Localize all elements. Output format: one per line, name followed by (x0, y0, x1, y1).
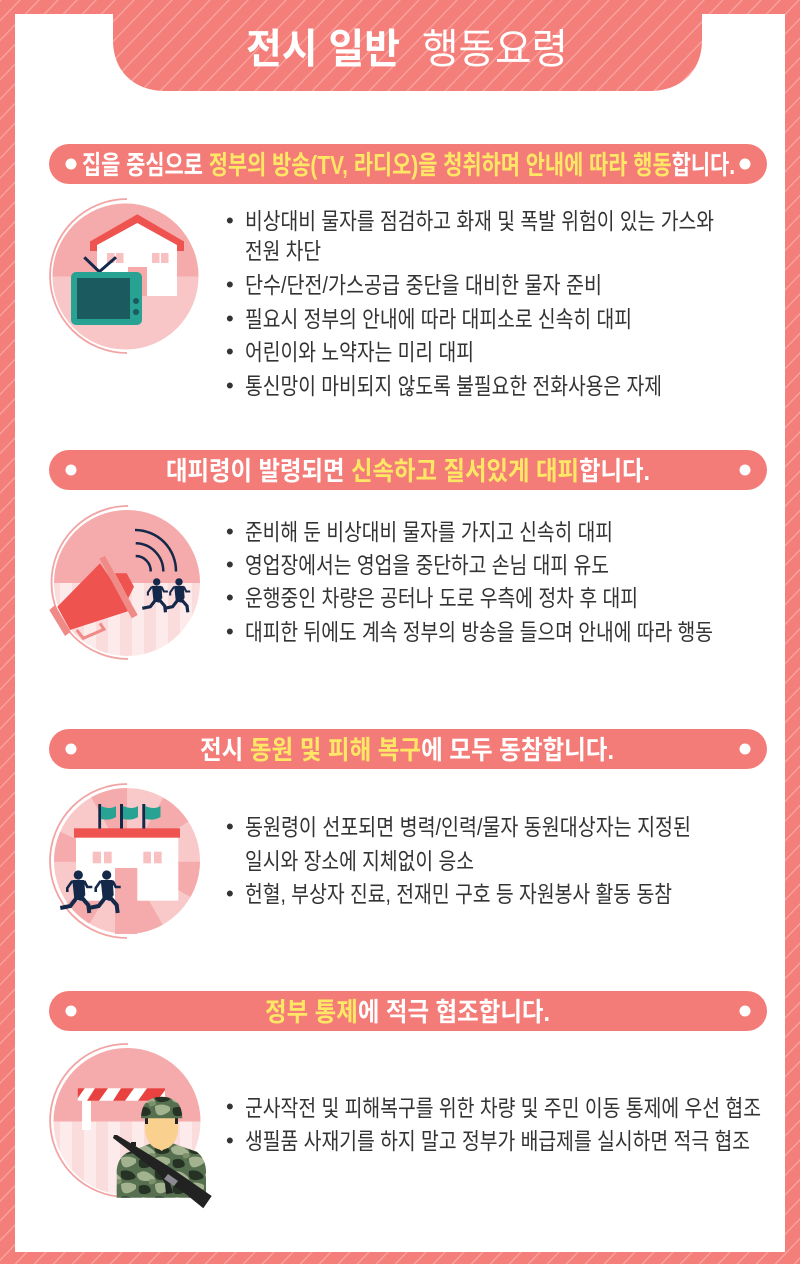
panel: section 3 mobilization (45, 729, 767, 955)
title: 전시 일반 (246, 26, 400, 72)
section 1 heading bar: 집을 중심으로 정부의 방송(TV, 라디오)을 청취하며 안내에 따라 행동합니다. (82, 150, 735, 180)
bullet list 3: • (226, 814, 234, 839)
title: 행동요령 (422, 26, 568, 72)
bullet list 3: 일시와 장소에 지체없이 응소 (245, 848, 474, 874)
bullet list 1: 어린이와 노약자는 미리 대피 (245, 339, 474, 365)
bullet list 2: 대피한 뒤에도 계속 정부의 방송을 들으며 안내에 따라 행동 (245, 619, 713, 645)
bullet list 2: • (226, 619, 234, 644)
bullet list 2: 영업장에서는 영업을 중단하고 손님 대피 유도 (245, 552, 609, 578)
bullet list 1: • (226, 208, 234, 233)
bullet list 3: • (226, 881, 234, 906)
bullet list 2: • (226, 552, 234, 577)
bullet list 2: • (226, 585, 234, 610)
bullet list 2: 운행중인 차량은 공터나 도로 우측에 정차 후 대피 (245, 585, 638, 611)
bullet list 2: 준비해 둔 비상대비 물자를 가지고 신속히 대피 (245, 519, 613, 545)
bullet list 1: • (226, 306, 234, 331)
section 3 heading bar: 전시 동원 및 피해 복구에 모두 동참합니다. (200, 735, 614, 765)
panel: section 4 government control (49, 991, 767, 1208)
title (246, 26, 568, 72)
section 4 heading bar: 정부 통제에 적극 협조합니다. (265, 997, 550, 1027)
bullet list 1: 통신망이 마비되지 않도록 불필요한 전화사용은 자제 (245, 373, 662, 399)
bullet list 2 (226, 519, 713, 645)
bullet list 2: • (226, 519, 234, 544)
bullet list 4: • (226, 1094, 234, 1119)
icon: house and television (50, 199, 198, 353)
bullet list 1: • (226, 373, 234, 398)
section 2 heading bar (49, 450, 767, 490)
bullet list 1: 전원 차단 (245, 238, 321, 264)
bullet list 1: • (226, 339, 234, 364)
bullet list 1: 필요시 정부의 안내에 따라 대피소로 신속히 대피 (245, 306, 632, 332)
panel: section 2 evacuation (49, 450, 767, 659)
bullet list 3 (226, 814, 691, 907)
bullet list 1 (226, 208, 714, 399)
section 2 heading bar: 대피령이 발령되면 신속하고 질서있게 대피합니다. (166, 456, 650, 486)
panel: section 1 home (49, 144, 767, 399)
icon: barrier and soldier (50, 1044, 212, 1208)
bullet list 3: 헌혈, 부상자 진료, 전재민 구호 등 자원봉사 활동 동참 (245, 881, 672, 907)
bullet list 1: 비상대비 물자를 점검하고 화재 및 폭발 위험이 있는 가스와 (245, 208, 714, 234)
bullet list 1: 단수/단전/가스공급 중단을 대비한 물자 준비 (245, 272, 602, 298)
bullet list 4: • (226, 1128, 234, 1153)
section 4 heading bar (49, 991, 767, 1031)
icon: building with flags and runners (49, 783, 200, 939)
section 3 heading bar (49, 729, 767, 769)
bullet list 3: 동원령이 선포되면 병력/인력/물자 동원대상자는 지정된 (245, 814, 691, 840)
bullet list 4 (226, 1094, 761, 1154)
bullet list 1: • (226, 272, 234, 297)
icon: megaphone and runners (49, 506, 200, 659)
